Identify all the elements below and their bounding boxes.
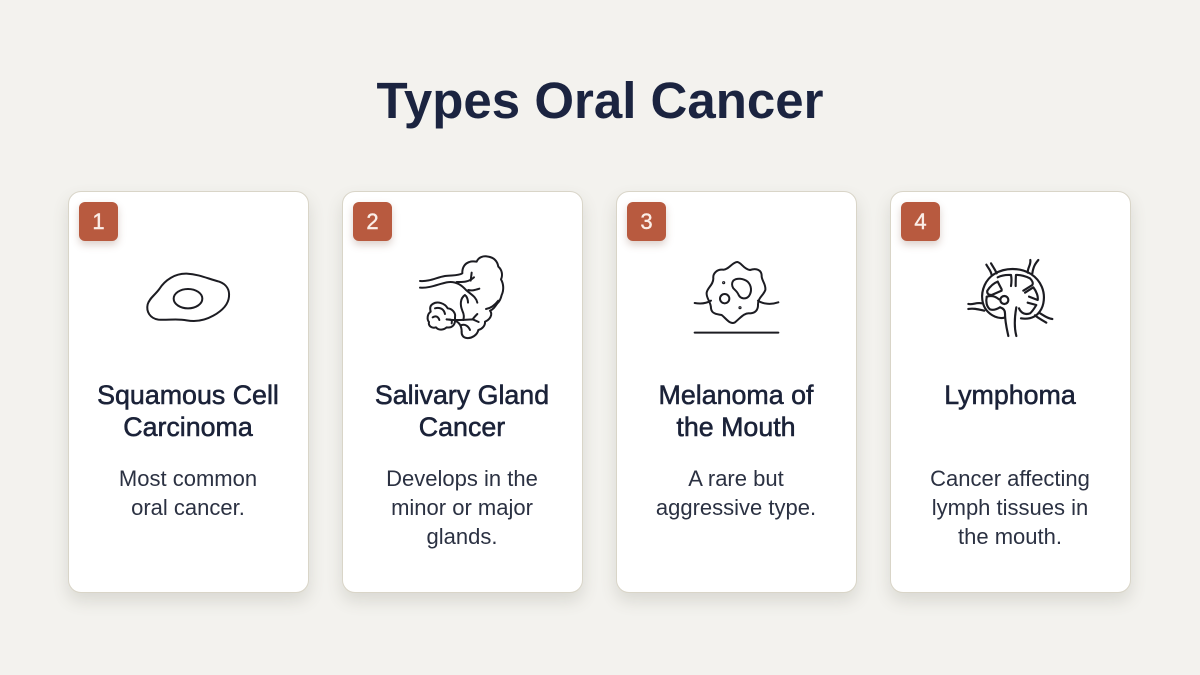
heading: melanoma of the mouth <box>659 380 814 442</box>
heading: salivary gland cancer <box>375 380 549 442</box>
description: squamous cell carcinoma: Most common <box>119 466 257 491</box>
panel: melanoma of the mouth <box>616 191 857 593</box>
icon: salivary gland <box>420 256 503 338</box>
description: squamous cell carcinoma <box>119 466 257 520</box>
heading: squamous cell carcinoma: Carcinoma <box>123 412 253 442</box>
panel: lymphoma <box>890 191 1131 593</box>
description: melanoma of the mouth: A rare but <box>688 466 784 491</box>
heading: melanoma of the mouth: the Mouth <box>676 412 796 442</box>
heading: salivary gland cancer: Salivary Gland <box>375 380 549 410</box>
description: melanoma of the mouth <box>656 466 816 520</box>
heading: squamous cell carcinoma: Squamous Cell <box>97 380 279 410</box>
description: lymphoma: lymph tissues in <box>932 495 1088 520</box>
badge 4 <box>901 202 940 241</box>
description: lymphoma <box>930 466 1090 549</box>
badge 1 <box>79 202 118 241</box>
description: melanoma of the mouth: aggressive type. <box>656 495 816 520</box>
icon: squamous cell <box>147 274 229 321</box>
title: Types Oral Cancer <box>377 72 823 129</box>
description: salivary gland cancer <box>386 466 538 549</box>
badge 2 <box>353 202 392 241</box>
description: lymphoma: Cancer affecting <box>930 466 1090 491</box>
icon: melanoma cell <box>695 262 778 333</box>
heading: squamous cell carcinoma <box>97 380 279 442</box>
badge 3 <box>627 202 666 241</box>
badge 1: 1 <box>92 209 105 234</box>
heading: salivary gland cancer: Cancer <box>419 412 505 442</box>
heading: lymphoma: Lymphoma <box>944 380 1076 410</box>
description: salivary gland cancer: glands. <box>427 524 497 549</box>
description: squamous cell carcinoma: oral cancer. <box>131 495 245 520</box>
icon: lymph node <box>968 260 1052 336</box>
panel: salivary gland cancer <box>342 191 583 593</box>
badge 4: 4 <box>914 209 927 234</box>
heading: melanoma of the mouth: Melanoma of <box>659 380 813 410</box>
description: salivary gland cancer: minor or major <box>391 495 533 520</box>
badge 2: 2 <box>366 209 379 234</box>
badge 3: 3 <box>640 209 653 234</box>
panel: squamous cell carcinoma <box>68 191 309 593</box>
description: salivary gland cancer: Develops in the <box>386 466 538 491</box>
description: lymphoma: the mouth. <box>958 524 1062 549</box>
